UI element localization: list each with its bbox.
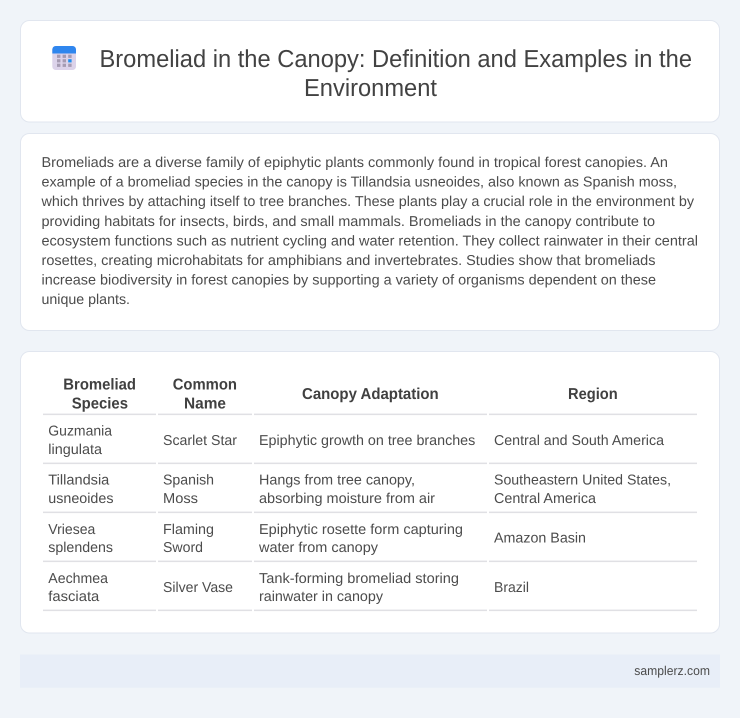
table row: Aechmea fasciata: Aechmea [48,571,108,587]
table row: Vriesea splendens: Sword [163,540,203,556]
table row: Aechmea fasciata: Tank-forming bromeliad storing [259,571,459,587]
table row: Vriesea splendens: Amazon Basin [494,530,586,546]
description text: rosettes, creating microhabitats for amphibians and invertebrates. Studies show that bromeliads [42,253,656,269]
description text: unique plants. [42,292,130,308]
table row: Guzmania lingulata: Central and South America [494,433,664,449]
table header row: Canopy Adaptation [302,386,439,403]
table header row: Name [184,396,226,412]
table row: Guzmania lingulata: Guzmania [48,424,112,440]
panel: title header [20,20,720,122]
table header row: Bromeliad [63,376,136,394]
table row: Guzmania lingulata: Epiphytic growth on tree branches [259,433,475,449]
table row: Tillandsia usneoides: Southeastern United States, [494,472,671,488]
table row: Aechmea fasciata: rainwater in canopy [259,589,384,605]
footer: samplerz.com [634,663,710,678]
table header row: Region [568,386,618,403]
description text: increase biodiversity in forest canopies by supporting a variety of organisms dependent on these [42,273,656,289]
table row: Vriesea splendens: water from canopy [258,540,379,556]
table row: Tillandsia usneoides: Central America [494,491,596,507]
table row: Aechmea fasciata: fasciata [48,589,99,605]
table row: Guzmania lingulata: lingulata [48,442,102,458]
title: Environment [304,75,437,102]
table row: Aechmea fasciata: Silver Vase [163,580,233,596]
title: Bromeliad in the Canopy: Definition and Examples in the [100,46,692,73]
table header row [43,376,697,415]
table header row: Species [72,396,128,412]
table row: Vriesea splendens: Vriesea [48,522,95,538]
table row: Guzmania lingulata [43,424,697,464]
table row: Tillandsia usneoides: usneoides [48,491,113,507]
icon: calendar [52,46,76,70]
panel: description [20,134,720,330]
description text: ecosystem functions such as nutrient cycling and water retention. They collect rainwater in their central [42,233,698,249]
table row: Tillandsia usneoides: Spanish [163,472,214,488]
panel: species table [20,352,720,633]
table row: Vriesea splendens [43,522,697,562]
title [100,46,692,102]
description text [40,155,698,308]
table row: Tillandsia usneoides: Tillandsia [48,472,109,488]
table row: Vriesea splendens: Epiphytic rosette form capturing [259,522,463,538]
description text: example of a bromeliad species in the canopy is Tillandsia usneoides, also known as Spanish moss, [42,175,677,191]
table row: Aechmea fasciata [43,571,697,611]
description text: Bromeliads are a diverse family of epiphytic plants commonly found in tropical forest canopies. An [42,155,668,171]
table row: Tillandsia usneoides [43,472,697,513]
table row: Aechmea fasciata: Brazil [494,580,529,596]
table row: Tillandsia usneoides: absorbing moisture from air [259,491,435,507]
table row: Vriesea splendens: splendens [48,540,113,556]
table header row: Common [173,376,237,394]
table row: Tillandsia usneoides: Moss [163,491,198,507]
footer [20,654,720,688]
description text: which thrives by attaching itself to tree branches. These plants play a crucial role in the environment by [40,194,695,210]
table row: Tillandsia usneoides: Hangs from tree canopy, [259,472,415,488]
table row: Vriesea splendens: Flaming [163,522,214,538]
table row: Guzmania lingulata: Scarlet Star [163,433,237,449]
description text: providing habitats for insects, birds, and small mammals. Bromeliads in the canopy contribute to [42,214,655,230]
